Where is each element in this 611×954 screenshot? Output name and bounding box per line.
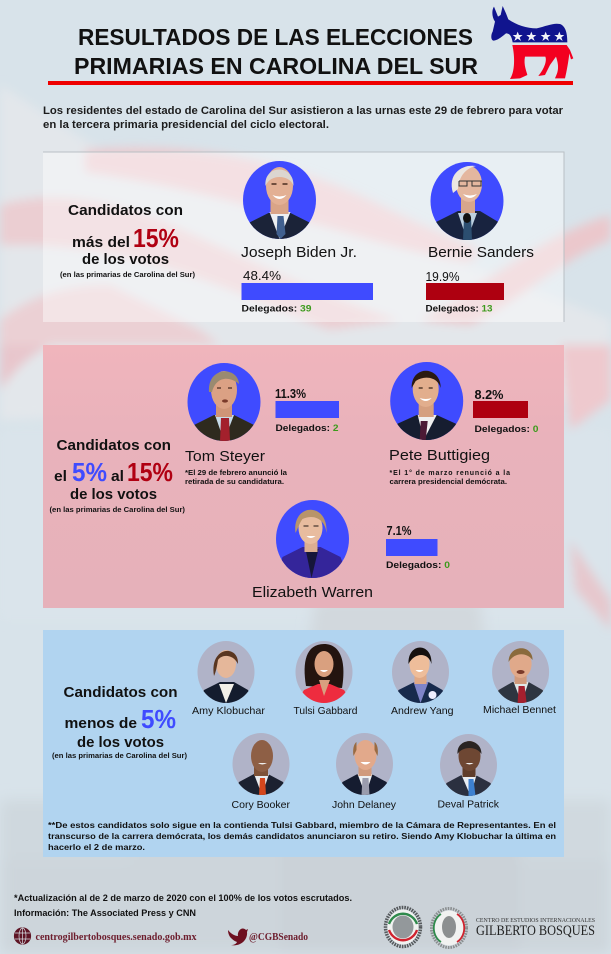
portrait: Pete Buttigieg [390,361,464,441]
panel heading: 5% to 15%: Candidatos con [56,438,171,454]
note: withdrawn candidates: hacerlo el 2 de marzo. [48,842,145,852]
bar: Warren 7.1%: 7.1% [386,524,412,538]
note: withdrawn candidates: transcurso de la carrera demócrata, los demás candidatos anunciaron su retiro. Siendo Amy Klobuchar la última en [48,831,556,841]
bar: Warren 7.1% [386,524,450,571]
panel heading: less than 5% [52,685,187,760]
note: withdrawn candidates [48,820,556,852]
panel heading: 5% to 15% [50,438,185,514]
bar: Steyer 11.3%: Delegados: 2 [276,423,338,434]
intro text: en la tercera primaria presidencial del ciclo electoral. [43,119,329,131]
panel heading: 5% to 15%: 5% [72,457,107,487]
candidate name: Amy Klobuchar: Amy Klobuchar [192,705,266,717]
portrait: Elizabeth Warren [276,499,350,579]
panel: 5% to 15% [43,345,564,608]
portrait: Bernie Sanders [430,161,504,241]
icon: globe [14,928,30,944]
panel heading: 5% to 15%: el [54,469,67,485]
logo text: Centro Gilberto Bosques: CENTRO DE ESTUDIOS INTERNACIONALES [476,917,595,924]
panel heading: more than 15%: de los votos [82,252,169,268]
panel: less than 5% [43,630,564,857]
panel heading: more than 15%: 15% [133,223,179,253]
panel heading: 5% to 15%: 15% [127,457,173,487]
candidate name: Tulsi Gabbard: Tulsi Gabbard [294,705,358,717]
candidate name: Pete Buttigieg: Pete Buttigieg [389,447,490,464]
intro text: Los residentes del estado de Carolina del Sur asistieron a las urnas este 29 de febrero para votar [43,105,564,117]
note: Steyer [185,470,287,486]
twitter handle: @CGBSenado [249,932,308,943]
bar: Buttigieg 8.2%: Delegados: 0 [474,424,538,435]
icon: twitter bird [228,929,248,945]
note: Steyer: *El 29 de febrero anunció la [185,470,287,477]
candidate name: Bernie Sanders: Bernie Sanders [428,244,534,261]
logo: Gilberto Bosques seal [432,908,466,948]
footer notes [14,893,352,918]
candidate name: Michael Bennet: Michael Bennet [483,704,556,716]
logo text: Centro Gilberto Bosques [476,917,595,939]
bar: Sanders 19.9%: 19.9% [426,270,460,284]
intro text [43,105,564,131]
icon: democratic donkey [491,6,573,79]
portrait: Joseph Biden [242,160,316,240]
panel heading: more than 15%: más del [72,235,130,251]
note: Buttigieg: carrera presidencial demócrata. [390,479,507,486]
bar: Warren 7.1%: Delegados: 0 [386,560,450,571]
footer notes: *Actualización al de 2 de marzo de 2020 con el 100% de los votos escrutados. [14,893,352,903]
panel heading: less than 5%: Candidatos con [64,685,178,701]
bar: Steyer 11.3%: 11.3% [275,387,306,401]
panel heading: more than 15%: Candidatos con [68,203,183,219]
portrait: Amy Klobuchar [197,640,255,704]
candidate name: Joseph Biden Jr.: Joseph Biden Jr. [241,244,357,261]
portrait: Cory Booker [232,732,290,796]
title: PRIMARIAS EN CAROLINA DEL SUR [74,53,478,79]
note: Buttigieg: *El 1° de marzo renunció a la [390,469,510,477]
bar: Sanders 19.9%: Delegados: 13 [426,304,492,314]
panel heading: less than 5%: menos de [64,716,137,732]
portrait: Michael Bennet [492,640,550,704]
note: Buttigieg [390,469,510,486]
note: withdrawn candidates: **De estos candidatos solo sigue en la contienda Tulsi Gabbard, miembro de la Cámara de Representantes. En el [48,820,556,830]
portrait: Tulsi Gabbard [295,640,353,704]
panel heading: more than 15% [60,203,195,279]
portrait: John Delaney [336,732,394,796]
panel heading: 5% to 15%: (en las primarias de Carolina del Sur) [50,507,185,514]
bar: Sanders 19.9% [426,270,504,314]
bar: Biden 48.4%: Delegados: 39 [242,304,312,314]
title underline [48,81,573,85]
footer notes: Información: The Associated Press y CNN [14,908,196,918]
bar: Steyer 11.3% [275,387,339,434]
panel heading: less than 5%: de los votos [77,735,164,751]
bar: Buttigieg 8.2% [473,388,538,435]
portrait: Tom Steyer [187,362,261,442]
panel heading: less than 5%: 5% [141,704,176,734]
note: Steyer: retirada de su candidatura. [185,479,284,486]
candidate name: Deval Patrick: Deval Patrick [438,798,500,810]
candidate name: Tom Steyer: Tom Steyer [185,448,265,465]
panel heading: 5% to 15%: de los votos [70,487,157,503]
candidate name: Cory Booker: Cory Booker [232,799,291,811]
bar: Buttigieg 8.2%: 8.2% [474,388,504,402]
panel: more than 15% [43,152,564,322]
bar: Biden 48.4%: 48.4% [243,269,281,283]
website: centrogilbertobosques.senado.gob.mx [36,931,197,943]
title [74,24,478,79]
panel heading: more than 15%: (en las primarias de Carolina del Sur) [60,272,195,279]
bar: Biden 48.4% [242,269,373,314]
candidate name: Andrew Yang: Andrew Yang [391,705,454,717]
portrait: Andrew Yang [392,640,450,704]
title: RESULTADOS DE LAS ELECCIONES [78,24,473,50]
logo: Senado de la República [386,908,420,946]
candidate name: John Delaney: John Delaney [332,799,397,811]
portrait: Deval Patrick [440,733,498,797]
candidate name: Elizabeth Warren: Elizabeth Warren [252,584,373,601]
panel heading: 5% to 15%: al [111,469,124,485]
panel heading: less than 5%: (en las primarias de Carolina del Sur) [52,753,187,760]
